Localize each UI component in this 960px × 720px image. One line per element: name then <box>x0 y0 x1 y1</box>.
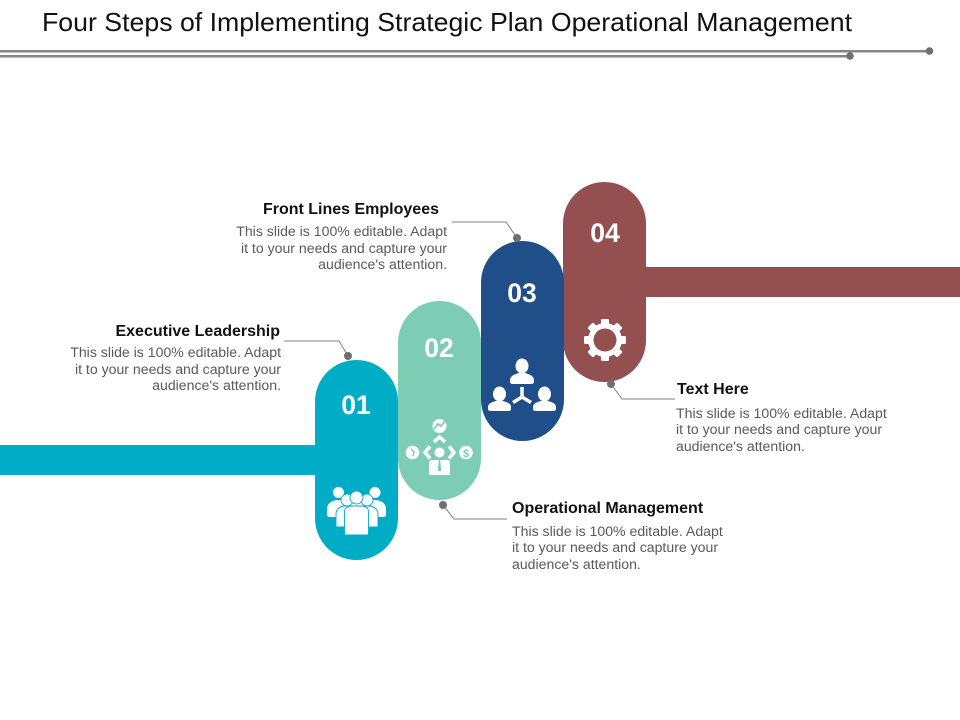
body text: This slide is 100% editable. Adapt <box>236 223 447 239</box>
callout: Operational Management <box>439 500 723 572</box>
callout: Executive Leadership <box>70 323 352 393</box>
number 02: 02 <box>424 333 454 363</box>
right maroon bar <box>640 267 960 297</box>
body text: it to your needs and capture your <box>676 421 882 437</box>
heading: Front Lines Employees <box>263 201 439 218</box>
step 02 pill <box>398 301 481 500</box>
callout: Front Lines Employees <box>236 201 521 272</box>
heading: Operational Management <box>512 500 704 517</box>
body text: audience's attention. <box>676 438 805 454</box>
body text: it to your needs and capture your <box>512 539 718 555</box>
number 04: 04 <box>590 218 620 248</box>
body text: This slide is 100% editable. Adapt <box>70 344 281 360</box>
header rule: lower line with dot <box>0 52 854 60</box>
step 01 pill <box>315 360 398 560</box>
callout: Text Here <box>607 380 887 454</box>
connector <box>284 341 352 360</box>
connector <box>452 222 521 242</box>
icon: manager with options <box>406 419 473 475</box>
header rule: upper line with dot <box>0 47 933 55</box>
body text: This slide is 100% editable. Adapt <box>512 523 723 539</box>
step 04 pill <box>563 182 646 382</box>
title: Four Steps of Implementing Strategic Plan Operational Management <box>42 9 852 37</box>
heading: Text Here <box>677 381 749 398</box>
body text: it to your needs and capture your <box>241 240 447 256</box>
connector <box>607 380 675 399</box>
body text: This slide is 100% editable. Adapt <box>676 405 887 421</box>
number 01: 01 <box>341 390 371 420</box>
icon: gear <box>584 319 626 361</box>
step 03 pill <box>481 241 564 441</box>
heading: Executive Leadership <box>115 323 280 340</box>
body text: audience's attention. <box>318 256 447 272</box>
dollar sign: $ <box>463 448 469 460</box>
body text: it to your needs and capture your <box>75 361 281 377</box>
connector <box>439 501 507 519</box>
number 03: 03 <box>507 278 537 308</box>
body text: audience's attention. <box>512 556 641 572</box>
icon: connected team <box>488 358 556 411</box>
left teal bar <box>0 445 320 475</box>
body text: audience's attention. <box>152 377 281 393</box>
icon: group of people <box>327 487 386 535</box>
